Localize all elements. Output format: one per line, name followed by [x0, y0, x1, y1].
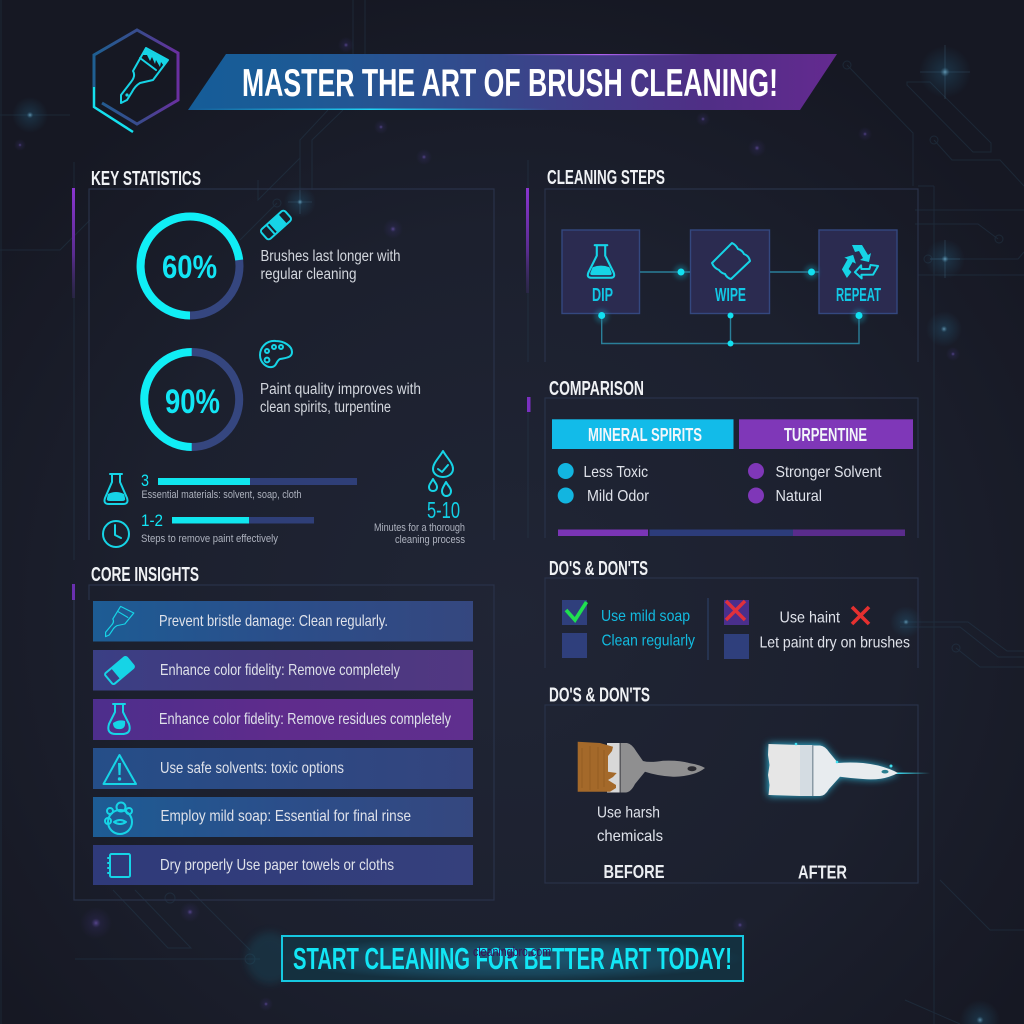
caption: use harsh chemicals	[597, 804, 663, 845]
column: mineral spirits: Less Toxic	[584, 464, 648, 481]
label: before: BEFORE	[604, 861, 664, 882]
label: after: AFTER	[798, 862, 847, 883]
panel: cleaning steps	[526, 166, 918, 362]
do: use mild soap: Use mild soap	[601, 608, 690, 625]
call to action: START CLEANING FOR BETTER ART TODAY!	[293, 941, 732, 976]
column: mineral spirits: Mild Odor	[587, 488, 650, 505]
call to action	[246, 932, 743, 984]
heading: core insights: CORE INSIGHTS	[91, 563, 199, 586]
don't: let paint dry	[724, 634, 910, 659]
insight row 2: Enhance color fidelity: Remove completely	[160, 662, 400, 679]
column: turpentine: Stronger Solvent	[776, 464, 882, 481]
text: paint quality: Paint quality improves with	[260, 381, 421, 398]
panel: before and after	[545, 684, 930, 883]
heading: cleaning steps: CLEANING STEPS	[547, 166, 665, 189]
insight row 3: Enhance color fidelity: Remove residues completely	[159, 711, 451, 728]
insight row 1	[93, 601, 473, 642]
insight row 4	[93, 748, 473, 789]
column: turpentine: Natural	[776, 488, 822, 505]
stat: 1-2 steps: 1-2	[141, 511, 163, 530]
insight row 5: Employ mild soap: Essential for final rinse	[160, 808, 411, 825]
text: brushes last longer	[260, 248, 400, 283]
don't: use harsh	[724, 600, 869, 626]
heading: do's and don'ts: DO'S & DON'TS	[549, 557, 648, 580]
insight row 5	[93, 797, 473, 837]
connector lines	[595, 265, 866, 346]
panel: comparison	[527, 377, 918, 538]
panel: core insights	[72, 563, 494, 900]
icon: flask	[104, 474, 128, 504]
heading: before and after: DO'S & DON'TS	[549, 684, 650, 706]
do: clean regularly: Clean regularly	[602, 633, 695, 650]
heading: key statistics: KEY STATISTICS	[91, 167, 201, 190]
icon: palette	[260, 341, 292, 367]
step: repeat	[819, 230, 897, 314]
heading: comparison: COMPARISON	[549, 377, 644, 400]
stat: 5-10 minutes	[374, 451, 465, 546]
stat: 5-10 minutes: cleaning process	[395, 534, 465, 546]
insight row 6: Dry properly Use paper towels or cloths	[160, 857, 394, 874]
stat: 1-2 steps	[103, 511, 314, 547]
illustration: dirty brush	[578, 742, 705, 792]
step: repeat: REPEAT	[836, 285, 881, 305]
donut chart: 60%	[140, 216, 240, 316]
stat: 3 essential materials	[104, 471, 357, 504]
donut chart: 90%: 90%	[165, 383, 220, 421]
title banner	[188, 54, 837, 110]
text: brushes last longer: Brushes last longer with	[260, 248, 400, 265]
caption: use harsh chemicals: chemicals	[597, 828, 663, 845]
insight row 6	[93, 845, 473, 885]
comparison bar	[558, 530, 905, 536]
step: wipe	[690, 230, 770, 314]
icon: water drops	[429, 451, 453, 496]
panel: key statistics	[72, 167, 494, 547]
do: clean regularly	[562, 633, 695, 658]
step: dip	[562, 230, 640, 314]
step: wipe: WIPE	[715, 285, 746, 305]
watermark: cleaningbro.com	[473, 945, 551, 959]
text: paint quality: clean spirits, turpentine	[260, 399, 391, 416]
stat: 5-10 minutes: Minutes for a thorough	[374, 522, 465, 534]
caption: use harsh chemicals: Use harsh	[597, 804, 660, 822]
insight row 1: Prevent bristle damage: Clean regularly.	[159, 613, 388, 630]
insight row 2	[93, 650, 473, 690]
column: mineral spirits: MINERAL SPIRITS	[588, 425, 702, 445]
donut chart: 90%	[144, 352, 239, 447]
stat: 3 essential materials: 3	[141, 471, 149, 490]
donut chart: 60%: 60%	[162, 249, 217, 285]
don't: use harsh: Use haint	[780, 610, 840, 626]
stat: 3 essential materials: Essential materials: solvent, soap, cloth	[142, 489, 302, 501]
icon: eraser	[260, 209, 292, 241]
insight row 3	[93, 699, 473, 740]
icon: clock	[103, 521, 129, 547]
column: turpentine: TURPENTINE	[784, 425, 867, 445]
column: turpentine	[739, 419, 913, 505]
text: paint quality	[260, 381, 421, 416]
stat: 5-10 minutes: 5-10	[427, 497, 460, 523]
title: MASTER THE ART OF BRUSH CLEANING!	[242, 62, 778, 105]
step: dip: DIP	[592, 285, 613, 305]
stat: 1-2 steps: Steps to remove paint effectively	[141, 533, 278, 545]
illustration: clean brush	[768, 743, 930, 796]
don't: let paint dry: Let paint dry on brushes	[760, 635, 910, 652]
column: mineral spirits	[552, 419, 734, 505]
text: brushes last longer: regular cleaning	[260, 266, 356, 283]
logo: hexagon brush icon	[94, 30, 178, 132]
panel: do's and don'ts	[545, 557, 918, 668]
do: use mild soap	[562, 600, 690, 625]
insight row 4: Use safe solvents: toxic options	[160, 760, 344, 777]
